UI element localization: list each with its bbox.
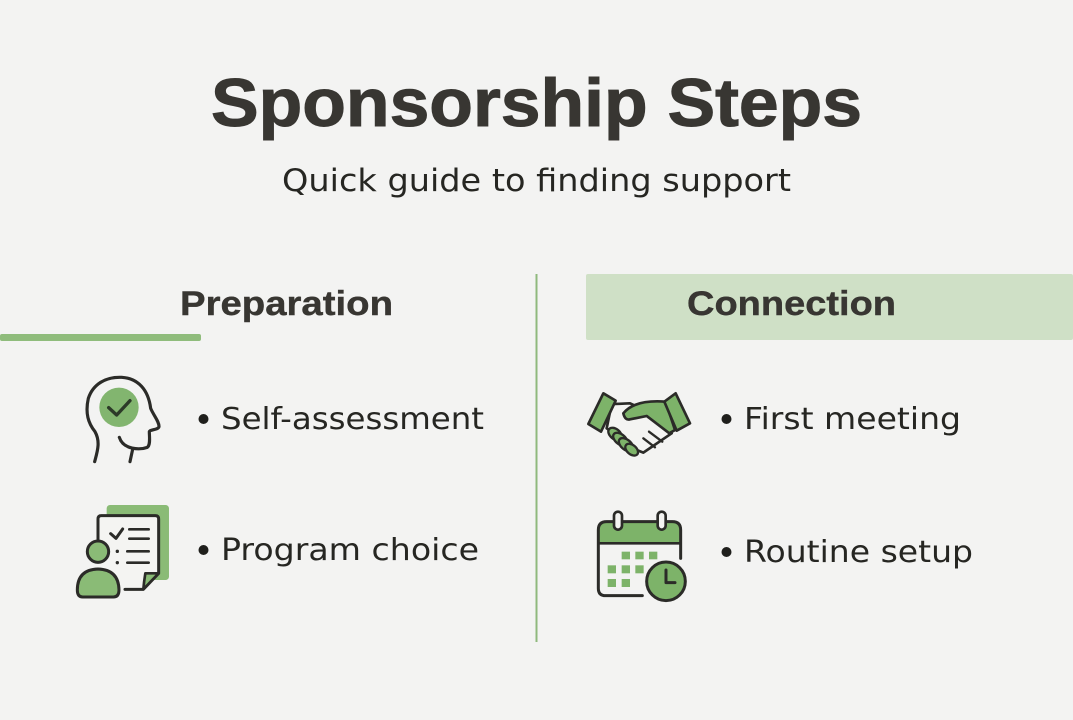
heading background bbox=[586, 274, 1073, 340]
heading underline bbox=[0, 334, 201, 341]
label: Program choice bbox=[221, 533, 479, 568]
heading: preparation: Preparation bbox=[180, 285, 393, 323]
bullet bbox=[198, 414, 208, 424]
label: Self-assessment bbox=[221, 402, 484, 437]
bullet bbox=[722, 547, 732, 557]
label: First meeting bbox=[744, 402, 961, 437]
bullet bbox=[198, 545, 208, 555]
item: program choice bbox=[198, 533, 479, 568]
item: self-assessment bbox=[198, 402, 484, 437]
icon: handshake bbox=[588, 393, 690, 458]
icon: checklist with person bbox=[77, 505, 169, 597]
icon: head with check mark bbox=[87, 377, 159, 462]
icon: calendar with clock bbox=[598, 512, 685, 601]
bullet bbox=[722, 414, 732, 424]
panel: preparation bbox=[0, 285, 484, 597]
heading: connection: Connection bbox=[687, 285, 896, 323]
label: Routine setup bbox=[744, 535, 973, 570]
panel: connection bbox=[586, 274, 1073, 601]
title: Sponsorship Steps bbox=[211, 65, 862, 141]
subtitle: Quick guide to finding support bbox=[282, 163, 791, 199]
item: first meeting bbox=[722, 402, 961, 437]
item: routine setup bbox=[722, 535, 973, 570]
divider bbox=[536, 274, 538, 642]
